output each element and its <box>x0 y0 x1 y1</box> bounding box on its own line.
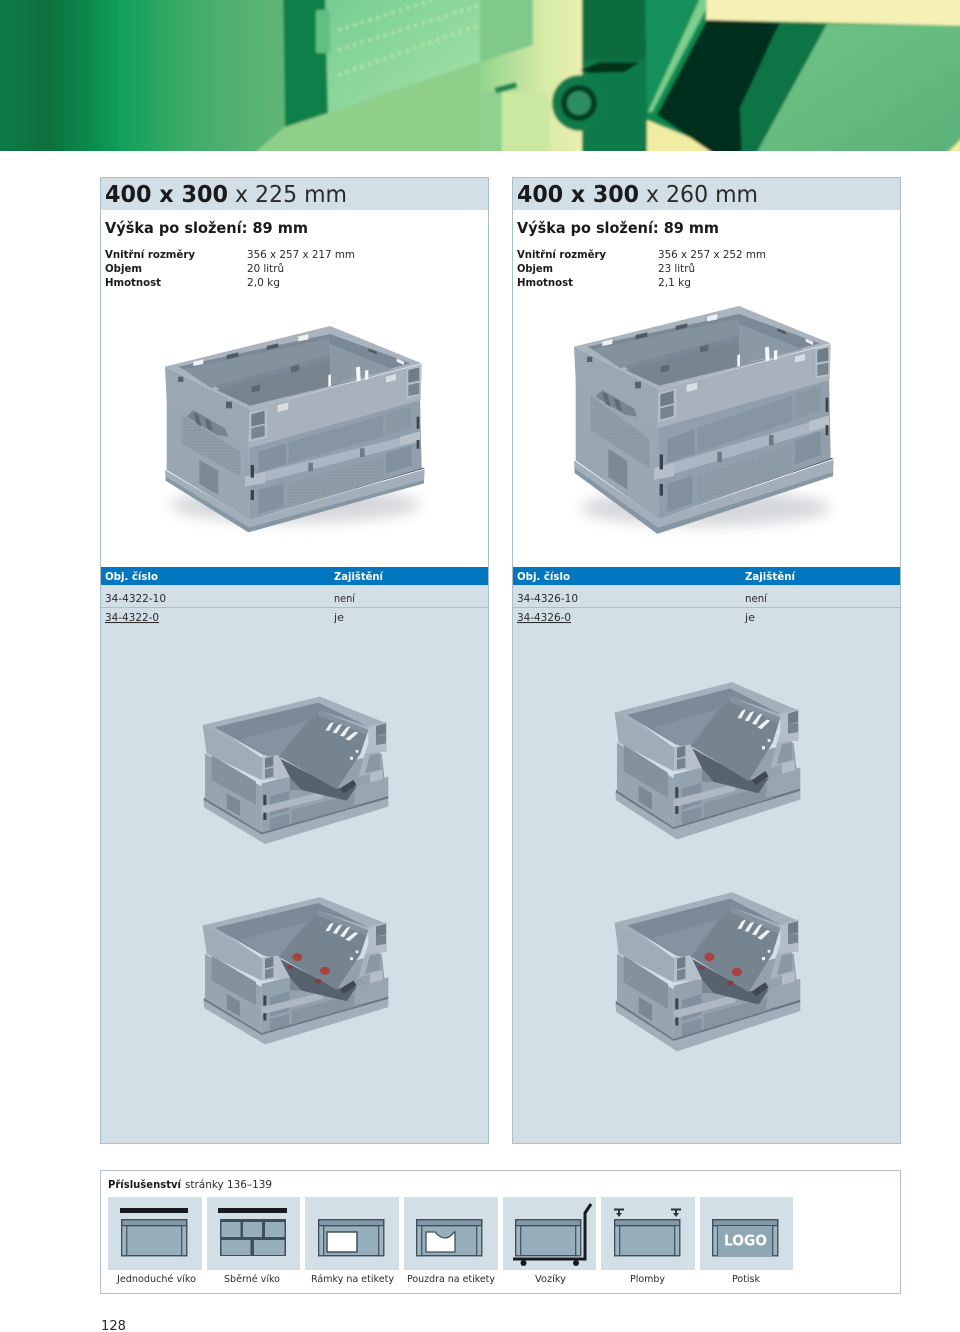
panel: left product <box>100 178 488 1144</box>
icon: label holders <box>404 1197 498 1270</box>
icon: logo print: LOGO <box>724 1232 767 1250</box>
table: left order numbers: je <box>333 612 344 624</box>
text block: right specifications: Vnitřní rozměry <box>517 248 606 261</box>
table: left order numbers <box>105 571 384 624</box>
table: left order numbers: Zajištění <box>334 571 384 583</box>
header photo: green hinge close-up <box>0 0 960 165</box>
table: left order numbers: 34-4322-10 <box>105 593 166 605</box>
table: left order numbers: Obj. číslo <box>105 571 158 583</box>
icon: logo print <box>700 1197 793 1270</box>
table: right order numbers: není <box>745 593 768 605</box>
heading: accessories: stránky 136–139 <box>185 1178 272 1191</box>
table: right order numbers: 34-4326-10 <box>517 593 578 605</box>
text block: left specifications: Vnitřní rozměry <box>105 248 195 261</box>
text block: right specifications: Hmotnost <box>517 276 573 289</box>
icon: label frames <box>305 1197 399 1270</box>
heading: left dimensions: 400 x 300 <box>105 182 228 208</box>
heading: right dimensions <box>517 182 758 208</box>
table: left order numbers: není <box>334 593 356 605</box>
table: left order numbers: 34-4322-0 <box>105 612 159 624</box>
accessory labels: Rámky na etikety <box>311 1273 394 1285</box>
icon: trolley <box>503 1197 596 1270</box>
text block: right specifications: 23 litrů <box>658 262 695 275</box>
text block: left specifications: 2,0 kg <box>247 276 280 289</box>
table: right order numbers <box>517 571 796 624</box>
text block: left specifications <box>105 248 355 289</box>
product photo: left crate with open flap and red locks <box>203 897 388 1044</box>
text block: right specifications: 356 x 257 x 252 mm <box>658 248 766 261</box>
text block: left specifications: Hmotnost <box>105 276 161 289</box>
accessory labels: Pouzdra na etikety <box>407 1274 495 1285</box>
product photo: right crate with open flap and red locks <box>615 892 800 1051</box>
icon: simple lid <box>108 1197 202 1270</box>
accessory labels: Potisk <box>732 1274 760 1285</box>
text block: left specifications: Objem <box>105 262 142 275</box>
accessory labels: Jednoduché víko <box>116 1273 196 1285</box>
table: right order numbers: 34-4326-0 <box>517 612 571 624</box>
accessory labels <box>116 1273 760 1285</box>
accessory labels: Sběrné víko <box>224 1273 280 1285</box>
product photo: left crate with open flap <box>203 697 388 844</box>
panel: accessories <box>100 1170 900 1294</box>
heading: left dimensions <box>105 182 347 208</box>
text block: right specifications <box>517 248 766 289</box>
table: right order numbers: Obj. číslo <box>517 571 570 583</box>
heading: left dimensions: x 225 mm <box>235 182 347 208</box>
table: right order numbers: Zajištění <box>745 571 796 583</box>
accessory labels: Vozíky <box>535 1273 566 1285</box>
product photo: right crate with open flap <box>615 682 800 839</box>
text block: left specifications: 20 litrů <box>247 262 284 275</box>
icon: seals <box>601 1197 695 1270</box>
panel: right product <box>512 178 900 1144</box>
heading: accessories: Příslušenství <box>108 1178 182 1191</box>
heading: accessories <box>108 1178 272 1191</box>
icon: collecting lid <box>207 1197 300 1270</box>
accessory labels: Plomby <box>630 1274 665 1285</box>
heading: right dimensions: x 260 mm <box>646 182 758 208</box>
text block: right specifications: Objem <box>517 262 553 275</box>
heading: left folded height: Výška po složení: 89 mm <box>105 219 308 237</box>
table: right order numbers: je <box>744 612 755 624</box>
heading: right dimensions: 400 x 300 <box>517 182 639 208</box>
text block: left specifications: 356 x 257 x 217 mm <box>247 248 355 261</box>
product photo: right crate <box>574 306 834 534</box>
text block: right specifications: 2,1 kg <box>658 276 691 289</box>
product photo: left crate <box>165 326 425 532</box>
heading: right folded height: Výška po složení: 89 mm <box>517 219 719 237</box>
